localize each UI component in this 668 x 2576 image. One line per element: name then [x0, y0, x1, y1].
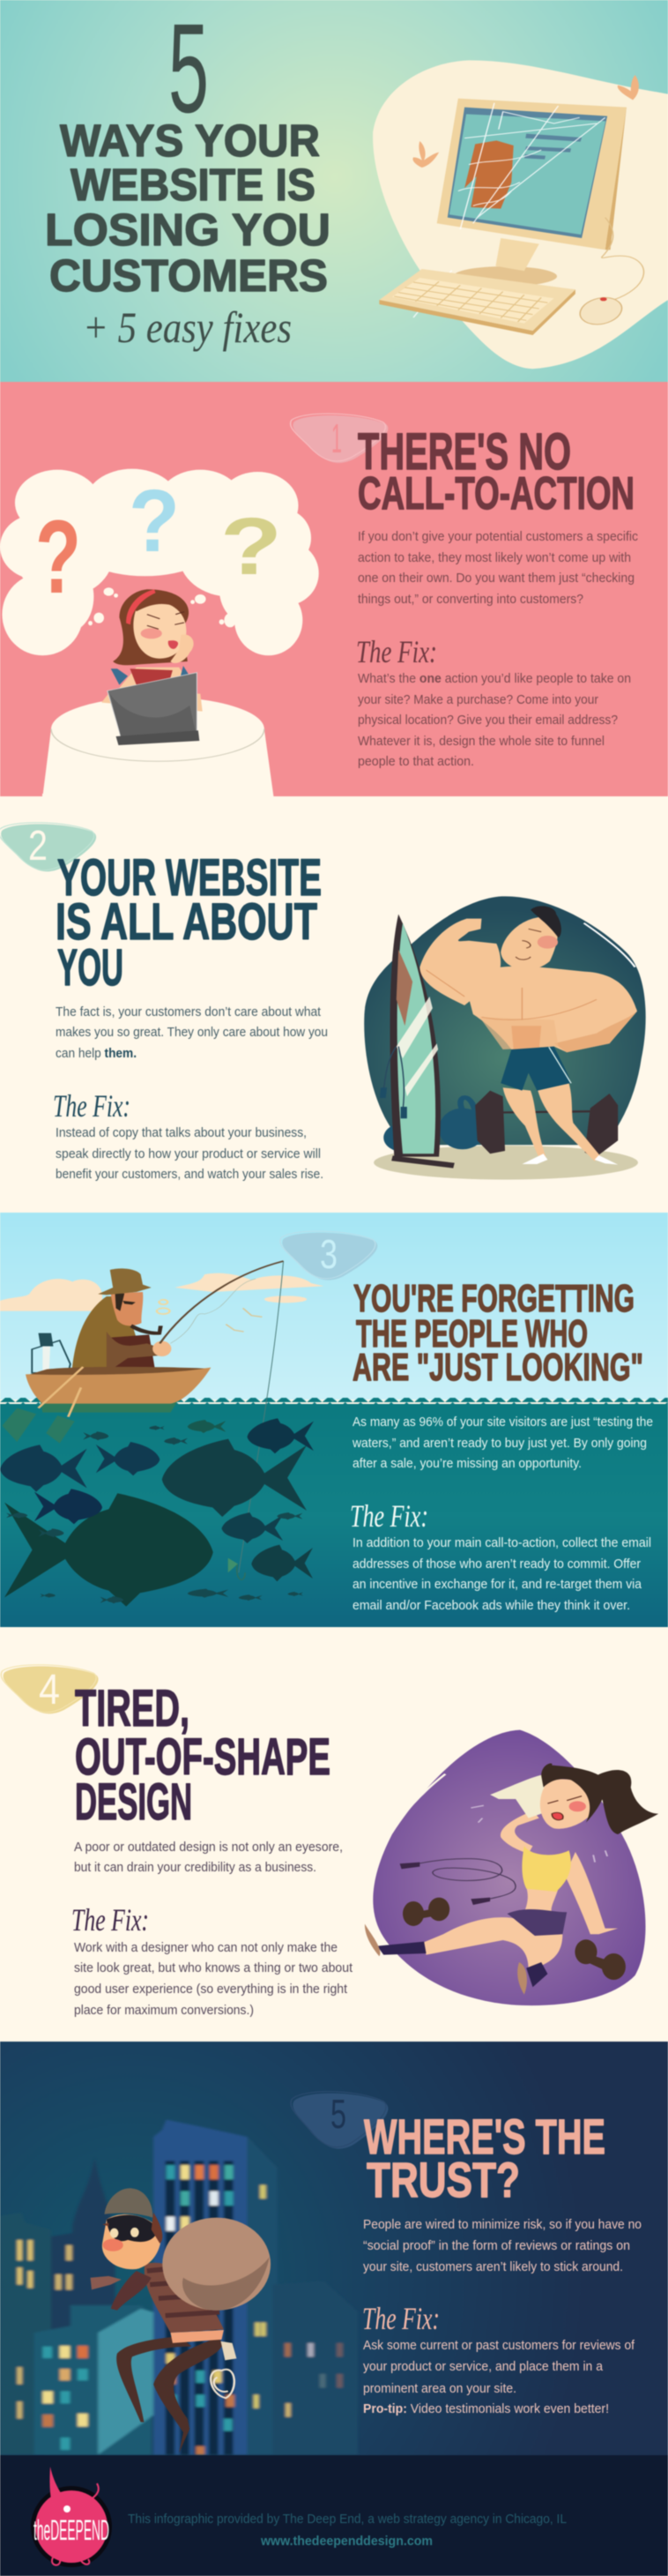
clouds — [0, 1279, 102, 1311]
keyboard — [379, 289, 575, 335]
fix text: your product or service, and place them in a — [363, 2360, 604, 2374]
illustration: fisherman in boat above school of fish — [0, 1261, 668, 1607]
boat — [41, 1402, 177, 1413]
panel: footer — [0, 2455, 668, 2576]
heading: TIRED, — [75, 1680, 189, 1737]
body text: The fact is, your customers don’t care about what — [56, 1005, 321, 1019]
fishing rod — [160, 1261, 284, 1343]
panel: 1 no call-to-action — [0, 382, 668, 796]
fix text: site look great, but who knows a thing or two about — [74, 1961, 353, 1975]
fix text: place for maximum conversions.) — [74, 2004, 254, 2018]
body text: If you don’t give your potential customers a specific — [358, 530, 638, 544]
fix text: What’s the one action you’d like people to take on — [358, 672, 631, 686]
face — [133, 602, 186, 659]
fix text — [363, 2339, 635, 2416]
body text — [56, 1005, 328, 1061]
oars — [39, 1367, 83, 1417]
fix text — [56, 1126, 323, 1182]
fix text — [353, 1536, 651, 1613]
panel: 4 out-of-shape design — [0, 1627, 668, 2042]
body text: “social proof” in the form of reviews or ratings on — [363, 2239, 630, 2253]
body text — [358, 530, 638, 607]
fish — [4, 1493, 213, 1607]
heading: OUT-OF-SHAPE — [75, 1729, 330, 1786]
fix text: Whatever it is, design the whole site to funnel — [358, 735, 605, 749]
table — [42, 729, 273, 796]
number badge 5 — [291, 2091, 388, 2149]
mirror — [390, 915, 441, 1157]
body text: People are wired to minimize risk, so if you have no — [363, 2218, 642, 2232]
number badge 1: 1 — [331, 415, 342, 461]
title: main headline: CUSTOMERS — [49, 250, 328, 301]
heading: THERE'S NO — [358, 423, 571, 481]
title: main headline: WAYS YOUR — [60, 116, 320, 166]
fix text: physical location? Give you their email address? — [358, 713, 618, 728]
question marks — [35, 472, 282, 616]
arm — [501, 1811, 539, 1854]
body text — [363, 2218, 642, 2274]
head — [540, 1779, 597, 1829]
butterflies — [618, 75, 639, 100]
mouse — [602, 218, 644, 300]
panel: footer: theDEEPEND — [33, 2514, 109, 2546]
the fix label: The Fix: — [362, 2301, 440, 2336]
fix text: speak directly to how your product or service will — [56, 1147, 321, 1161]
illustration: blurred night city skyline — [0, 2120, 358, 2454]
man — [419, 919, 501, 1005]
illustration: abandoned computer covered in cobwebs — [373, 60, 668, 369]
logo: The Deep End squid — [31, 2467, 112, 2567]
body text: action to take, they most likely won’t come up with — [358, 551, 631, 565]
fix text: benefit your customers, and watch your sales rise. — [56, 1168, 323, 1182]
footer credit text: This infographic provided by The Deep End, a web strategy agency in Chicago, IL — [128, 2513, 567, 2527]
illustration: burglar with sack — [91, 2188, 271, 2453]
ponytail — [597, 1770, 658, 1834]
body text: can help them. — [56, 1047, 137, 1061]
footer credit text: www.thedeependdesign.com — [260, 2535, 433, 2549]
body text: after a sale, you’re missing an opportunity. — [353, 1457, 582, 1471]
body text: A poor or outdated design is not only an eyesore, — [74, 1841, 343, 1855]
number badge 2: 2 — [28, 823, 48, 870]
body text — [74, 1841, 343, 1875]
question marks: ? — [129, 472, 180, 571]
body text: makes you so great. They only care about how you — [56, 1026, 328, 1040]
body text: waters,” and aren’t ready to buy just yet. By only going — [352, 1437, 647, 1451]
the fix label: The Fix: — [53, 1088, 130, 1124]
sack — [162, 2218, 271, 2311]
heading: DESIGN — [75, 1773, 192, 1831]
title: main headline: WEBSITE IS — [71, 160, 315, 210]
heading: TRUST? — [367, 2152, 520, 2207]
towel — [490, 1774, 550, 1818]
lantern — [32, 1333, 71, 1373]
heading — [56, 849, 322, 997]
number badge 3: 3 — [320, 1231, 338, 1277]
title: big number 5: 5 — [168, 0, 209, 139]
panel: 3 just looking — [0, 1213, 668, 1627]
body text: As many as 96% of your site visitors are just “testing the — [353, 1415, 653, 1430]
fix text: In addition to your main call-to-action, collect the email — [353, 1536, 651, 1550]
weights — [383, 1123, 427, 1153]
legs and body — [565, 1852, 618, 1934]
illustration: confused girl at laptop with thought cloud — [0, 469, 319, 796]
number badge 3 — [280, 1231, 377, 1281]
torso — [145, 2263, 224, 2333]
title: main headline — [45, 116, 330, 301]
fix text: prominent area on your site. — [363, 2382, 516, 2396]
fix text: Ask some current or past customers for reviews of — [363, 2339, 635, 2353]
number badge 5: 5 — [330, 2091, 346, 2137]
subtitle: 5 easy fixes: + 5 easy fixes — [83, 302, 292, 352]
fish line — [239, 1261, 284, 1572]
birds — [226, 1308, 262, 1332]
skipping rope — [412, 1859, 516, 1900]
panel: 5 where's the trust — [0, 2042, 668, 2455]
heading — [364, 2109, 605, 2207]
jacket — [464, 140, 514, 209]
sweat marks — [471, 1805, 607, 1863]
the fix label: The Fix: — [71, 1902, 149, 1938]
fisherman — [71, 1296, 147, 1374]
number badge 4: 4 — [39, 1667, 60, 1714]
body text: things out,” or converting into customers? — [358, 593, 583, 607]
fix text — [74, 1941, 353, 2018]
fix text — [358, 672, 631, 769]
footer credit text — [128, 2513, 567, 2549]
the fix label: The Fix: — [356, 634, 437, 669]
fix text: email and/or Facebook ads while they think it over. — [353, 1599, 630, 1613]
fix text: Work with a designer who can not only make the — [74, 1941, 338, 1955]
heading — [353, 1277, 643, 1389]
number badge 2 — [0, 823, 96, 871]
fix text: good user experience (so everything is in the right — [74, 1982, 347, 1997]
body text: but it can drain your credibility as a business. — [74, 1861, 316, 1875]
heading: IS ALL ABOUT — [56, 893, 317, 951]
fix text: Instead of copy that talks about your business, — [56, 1126, 307, 1140]
fix text: an incentive in exchange for it, and re-target them via — [353, 1578, 642, 1592]
fix text: addresses of those who aren’t ready to commit. Offer — [353, 1557, 641, 1572]
body text: your site, customers aren’t likely to stick around. — [363, 2260, 623, 2274]
fix text: your site? Make a purchase? Come into your — [358, 693, 598, 707]
the fix label: The Fix: — [350, 1498, 428, 1534]
body text: one on their own. Do you want them just “checking — [358, 571, 635, 586]
title: main headline: LOSING YOU — [45, 205, 330, 255]
fix text: people to that action. — [358, 755, 474, 769]
heading: YOU — [57, 939, 123, 997]
question marks: ? — [35, 499, 81, 616]
fix text: Pro-tip: Video testimonials work even better! — [363, 2402, 609, 2416]
body text — [352, 1415, 653, 1471]
heading — [358, 423, 635, 519]
head — [102, 2214, 161, 2269]
illustration: bodybuilder flexing at mirror — [364, 896, 646, 1180]
hair back — [113, 589, 189, 665]
heading — [75, 1680, 330, 1831]
number badge 4 — [1, 1665, 99, 1714]
laptop — [108, 673, 197, 739]
number badge 1 — [291, 414, 388, 463]
dumbbells — [403, 1898, 626, 1980]
illustration: tired woman after workout — [365, 1730, 658, 2005]
heading: YOUR WEBSITE — [57, 849, 322, 907]
panel: hero header — [0, 0, 668, 382]
question marks: ? — [220, 502, 282, 592]
panel: 2 all about you — [0, 794, 668, 1213]
